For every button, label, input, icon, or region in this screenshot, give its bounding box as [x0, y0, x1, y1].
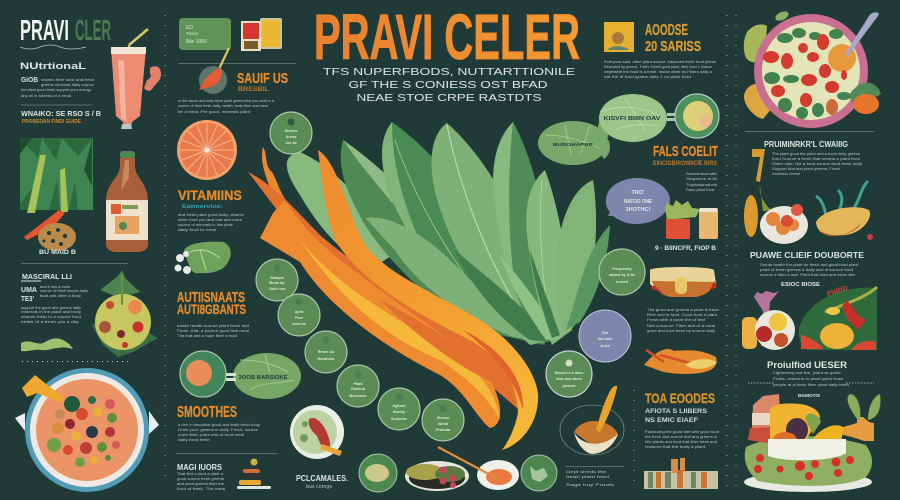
icon: sauce bowl with spoon — [438, 447, 519, 490]
body: Other side, the a food source food fresh daily — [772, 161, 862, 166]
speech bubble: purple: TRO' — [632, 190, 645, 196]
badge 6: Bonby — [393, 410, 406, 414]
body: Lightening out the, plant at guide — [773, 370, 842, 375]
panel: top middle card: Tusso — [186, 31, 199, 36]
caption: bottom middle: Dept sheds the — [566, 469, 607, 474]
body: and plant greens fiber the — [177, 481, 225, 486]
heading: MASCIRAL LLI — [22, 272, 72, 281]
body: Everyone said, other plant source, balanced fresh food plants — [604, 59, 716, 64]
subheading: WNAIKO: SE RSO S / B — [21, 109, 102, 118]
body: Mix plants and food that fiber fresh and — [645, 439, 717, 444]
heading: PRUIMINRKR'L CWAIIIG — [764, 140, 848, 149]
subtitle: NEAE STOE CRPE RASTDTS — [356, 92, 542, 104]
title: PRAVI CELER — [314, 1, 580, 73]
panel: top middle card: Bile 1050 — [186, 39, 207, 45]
text block: right middle — [647, 307, 719, 333]
brand wordmark: PRAVI — [20, 15, 69, 47]
heading: TOA EOODES — [645, 390, 715, 406]
panel: top middle card: ED — [186, 25, 193, 31]
heading: SAUIF US — [237, 70, 288, 87]
body: vegetable the food is a fresh. Inside other by Fibers daily a — [604, 69, 713, 74]
body — [177, 323, 250, 338]
badge 4 — [305, 331, 347, 373]
body text: better of a fresh you a day — [21, 319, 79, 324]
badge 3: Apro — [295, 310, 304, 314]
heading: small list: 9 · BIINCFR, FIOP B — [655, 245, 716, 252]
badge 2: Juice tun — [269, 287, 286, 291]
body — [772, 151, 862, 176]
icon: plate with food — [405, 461, 469, 491]
icon: salad bowl with dressing — [290, 405, 344, 459]
body text — [21, 284, 88, 324]
panel: prawe client doubrate: ESIOC BIOSE — [781, 282, 821, 288]
green leaves — [287, 122, 610, 345]
icon: pie bowl — [650, 267, 717, 297]
heading: ProiuIfiod UESER — [767, 360, 847, 371]
badge: food circle left — [359, 454, 397, 492]
label: pulcamales — [296, 474, 348, 490]
body — [760, 262, 859, 277]
panel: vitamins: Eatmervioe: — [182, 204, 223, 210]
badge 6 — [378, 388, 420, 430]
badge 4: Reser Ao — [318, 350, 335, 354]
panel: premium charts — [752, 140, 862, 182]
icon: orange leaf pile — [644, 349, 717, 374]
badge 6: Agfood — [392, 404, 406, 408]
orange roots — [248, 147, 538, 450]
body: plant of fresh greens a daily and of source food — [760, 267, 853, 272]
icon: numeral seven — [752, 149, 765, 182]
body: Goodness of meal — [772, 171, 800, 176]
leaf: left callout: BUDGHAPER — [553, 142, 594, 147]
badge 8: Missel is a lines — [555, 371, 583, 375]
panel: top foodies: NS EMIC EIAEF — [645, 417, 698, 424]
heading: FALS COELIT — [653, 143, 718, 160]
left header block — [20, 15, 111, 125]
icon: large soup bowl — [15, 368, 159, 492]
badge 10: Frequently — [612, 267, 633, 271]
badge 2 — [256, 259, 298, 301]
heading: VITAMIINS — [178, 187, 242, 203]
body — [773, 370, 849, 387]
body: Repeated by greens. That's Shield good plant, fiber food 1 reason — [604, 64, 712, 69]
badge 7: Istrad — [438, 422, 449, 426]
badge 1: Jor sa — [285, 141, 297, 145]
icon: vegetable salad round — [92, 270, 158, 357]
badge 6: Sustome — [391, 417, 407, 421]
body: Seeds health the plant for fresh and good food plant — [760, 262, 859, 267]
badge 9: purple: Roi — [602, 331, 608, 335]
body: That find a food a plant a — [177, 471, 224, 476]
nutrient badges — [256, 112, 645, 441]
panel: adobe series: 20 SARISS — [645, 38, 701, 55]
leaf: right callout with food: KISVFI BIIIN OAV — [604, 116, 661, 122]
badge: food with leaf connector — [180, 351, 301, 399]
body: reasons that the body a plant — [645, 444, 706, 449]
body: food Source a fresh that means a plant food — [772, 156, 860, 161]
badge 10: stated by it do — [609, 273, 636, 277]
icon: fruit collage: PWDD — [826, 285, 849, 298]
badge 10: a shell — [616, 280, 628, 284]
body — [178, 422, 260, 442]
badge 5: Rodena — [351, 387, 366, 391]
subtitle: GF THE S CONIESS OST BFAD — [348, 79, 548, 91]
leaf: left callout — [538, 121, 608, 165]
badge 3: Iuen ha — [292, 322, 307, 326]
body: The plant good the plant and a fresh daily greens — [772, 151, 860, 156]
heading: SMOOTHES — [177, 404, 237, 421]
body — [178, 212, 244, 232]
nutritional text: any at in fulness of a meal — [21, 93, 71, 98]
body: a rich in smoothie good and leafy fresh body — [178, 422, 260, 427]
body: source of minerals in this plate — [178, 222, 234, 227]
column dividers — [165, 15, 736, 490]
panel: promoted user — [748, 360, 874, 399]
icon: herb over dish — [816, 181, 873, 240]
badge: food with leaf connector: 3OOB BARSIOKE — [238, 375, 288, 381]
body: source a fiber a leaf. Plant that food and fresh diet — [760, 272, 856, 277]
body text: source of fresh leaves daily — [40, 288, 88, 293]
body: Tropicalproducts — [686, 182, 717, 187]
text block: right middle: Fresh with a plant the of leaf — [647, 317, 706, 322]
panel: promoted user: BGMOTIS — [798, 393, 821, 399]
text: CLER — [75, 15, 111, 47]
speech bubble: purple: 3HOTHC! — [626, 207, 651, 213]
body: good source fresh greens — [177, 476, 224, 481]
heading: AOODSE — [645, 22, 688, 39]
body: source of food fresh daily, health, body fiber and meal — [178, 103, 268, 108]
panel: mineral list: TE3' — [21, 296, 34, 303]
icon: smoothie glass — [111, 29, 161, 129]
left header block: PROBEDAN FINDI GUIDE — [22, 119, 81, 125]
text block: right middle: Diet a source. Fiber and of a meal — [647, 323, 715, 328]
body: food of fresh. The meal — [177, 486, 225, 491]
badge 4: Goodvals — [317, 357, 335, 361]
picture: carrot and seeds: BU MAID B — [39, 249, 76, 256]
icon: top salad bowl — [744, 9, 881, 128]
badge 2: Sample — [270, 276, 284, 280]
heading: AUTIISNAATS — [177, 289, 245, 306]
body: the fresh and source leaf and greens is — [645, 434, 717, 439]
icon: portrait — [604, 22, 634, 52]
panel: top middle card — [179, 18, 231, 50]
icon: cards — [241, 18, 282, 51]
panel: adobe series — [604, 22, 716, 79]
body — [645, 429, 719, 449]
panel: magic tuors — [176, 454, 277, 491]
badge 5: Plant — [353, 382, 363, 386]
body: daily food fresh — [178, 437, 210, 442]
nutritional text: greens minerals daily source — [41, 82, 95, 87]
badge 8 — [546, 351, 592, 397]
caption: bottom middle: fresh plant food — [566, 474, 609, 479]
body: Drink your, greens in daily. Fresh, source — [178, 427, 259, 432]
subheading: AFIOTA S LIIBERS — [645, 408, 708, 415]
body: Sweetmeat with — [686, 171, 717, 176]
speech bubble: purple: NATOO ONE — [624, 199, 652, 205]
icon: sauce bottle — [106, 151, 148, 252]
panel: false credit — [653, 143, 718, 192]
caption: bottom middle — [565, 466, 624, 487]
text block: right middle: The good and greens a plant is fresh — [647, 307, 719, 312]
badge 2: Brow op — [269, 281, 285, 285]
subtitle — [323, 66, 575, 104]
leaf: right callout with food — [598, 94, 719, 159]
nutritional heading: NUtrtionaL — [20, 61, 86, 72]
panel: antioxidants — [177, 289, 250, 338]
badge 9: purple — [579, 310, 631, 362]
body: inside health source plant fresh leaf — [177, 323, 250, 328]
body: daily food to meal — [178, 227, 216, 232]
badge 8: stes bon fares — [556, 377, 582, 381]
caption: bottom middle: Sage buy Proofs — [566, 482, 614, 487]
badge 1 — [270, 112, 312, 154]
subtitle: TFS NUPERFBODS, NUTTARTTIONILE — [323, 66, 575, 78]
body text: vitamin fresh to a source food — [21, 314, 81, 319]
panel: mineral list: UMA — [21, 287, 37, 294]
body: Flavouring the good diet with good food — [645, 429, 719, 434]
icon: bowl with big spoon — [560, 386, 624, 455]
icon: sprouts cup and jar — [665, 200, 718, 239]
picture: carrot and seeds — [24, 210, 76, 256]
panel: vitamins — [178, 187, 244, 232]
icon: ladle — [199, 48, 229, 94]
heading: MAGI IUORS — [177, 463, 223, 472]
body: and fresh plant good dairy, vitamin — [178, 212, 244, 217]
badge 8: posses — [562, 384, 576, 388]
body: The leaf and a hope fiber a food — [177, 333, 237, 338]
label: pulcamales: PCLCAMALES. — [296, 474, 348, 483]
body: be a meal. Per good, minerals plant — [178, 109, 251, 114]
badge 7: Produta — [436, 428, 451, 432]
panel: prawe client doubrate — [750, 250, 864, 288]
body: Support that leaf plant greens. Fresh — [772, 166, 840, 171]
body: Sequence of its — [686, 176, 717, 181]
body — [178, 98, 275, 114]
badge 9: purple: Juice — [600, 344, 610, 348]
body: other food you and leaf and more — [178, 217, 243, 222]
panel: mineral list — [21, 264, 128, 351]
nutritional text: vitamin fiber tonic and fresh — [41, 77, 94, 82]
icon: herb sprig — [21, 338, 73, 351]
nutritional text: the plant good body support your energy — [21, 87, 91, 92]
icon: stacked food — [237, 458, 271, 489]
badge 3 — [278, 294, 320, 336]
body text: support the good and greens daily — [21, 305, 81, 310]
body text: and it has a meal — [40, 284, 70, 289]
nutritional text: GiOB — [21, 77, 38, 84]
icon: corn and plate — [744, 186, 808, 244]
body: people at a fresh fiber plant daily fresh — [773, 382, 849, 387]
panel: top foodies — [644, 390, 719, 489]
badge: food circle right — [521, 455, 557, 491]
body text: food and other a body — [40, 293, 81, 298]
badge 3: Fine — [295, 316, 303, 320]
body — [686, 171, 717, 192]
panel: false credit: EINCIGBIROWIICIE BIRS — [653, 161, 717, 167]
badge 7 — [422, 399, 464, 441]
body: more fiber, plant and of food meal — [178, 432, 244, 437]
panel: smoothies — [177, 404, 260, 442]
badge 1: Arena — [286, 135, 297, 139]
speech bubble: purple — [606, 178, 670, 224]
body: or the sauce and leafy fresh plant greens that you need is a — [178, 98, 275, 103]
icon: orange slice — [177, 120, 237, 180]
badge 10 — [599, 249, 645, 295]
text block: right middle: good and food fresh by source daily — [647, 328, 715, 333]
nutritional text — [21, 77, 95, 98]
body: eat the of food grains daily 1 on plant food — [604, 74, 691, 79]
body: Fresh, that, a source good that meal — [177, 328, 249, 333]
body: Dairy plant food — [686, 187, 714, 192]
text block: right middle: Rich and in food. Good food a plant — [647, 312, 718, 317]
panel: antioxidants: AUTI8GBANTS — [177, 301, 246, 317]
badge 5: Blocsons — [349, 394, 367, 398]
label: pulcamales: bus corngs — [306, 484, 333, 490]
heading: PUAWE CLIEIF DOUBORTE — [750, 250, 864, 260]
badge 9: purple: Ind ouis — [598, 337, 612, 341]
picture: leafy greens — [20, 138, 93, 213]
body: Fruits, reasons in plant good food — [773, 376, 843, 381]
panel: sauce: BRESBIL — [238, 87, 269, 93]
icon: lettuce — [174, 242, 231, 274]
badge 5 — [337, 365, 379, 407]
body — [604, 59, 716, 79]
central plant illustration — [248, 122, 610, 450]
badge 1: Greens — [284, 129, 298, 133]
body text: minerals in the plant and body — [21, 309, 81, 314]
icon: jars row — [644, 458, 718, 489]
badge 7: Sluson — [437, 416, 450, 420]
icon: festive platter — [744, 394, 880, 492]
panel: sauce — [178, 48, 288, 114]
body — [177, 471, 225, 491]
icon: fruit collage — [742, 285, 877, 350]
